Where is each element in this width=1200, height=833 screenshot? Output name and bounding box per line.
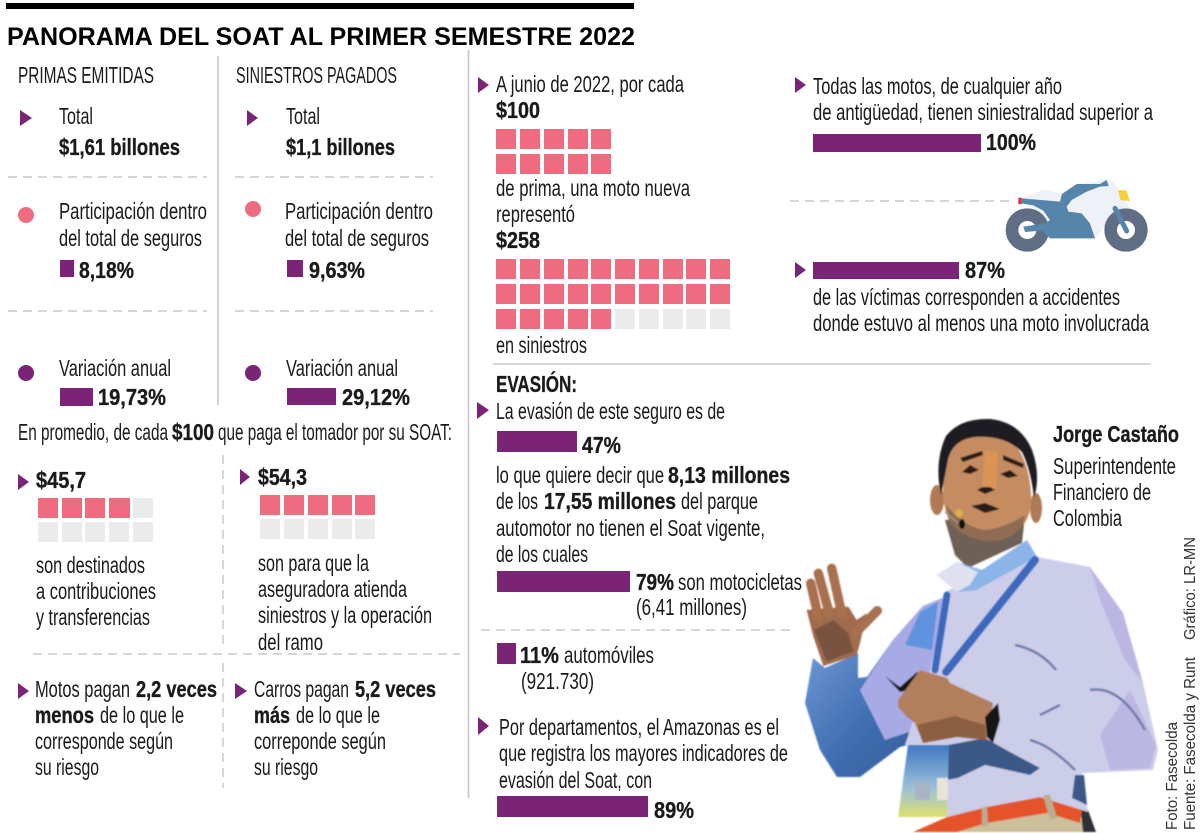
text millones: 17,55 millones — [544, 488, 676, 514]
trousers — [950, 810, 1086, 832]
text motos: de lo que le — [100, 702, 184, 728]
panel: $54,3 — [240, 464, 432, 655]
icon: triangle 87% — [795, 262, 806, 278]
torso — [905, 557, 1158, 817]
bar 19,73% — [60, 384, 166, 410]
total siniestros: $1,1 billones — [286, 134, 395, 160]
panel: a junio de 2022 — [478, 71, 730, 358]
total siniestros: Total — [286, 103, 320, 129]
text carros: correponde según — [254, 728, 386, 754]
collar — [937, 540, 1037, 592]
heading: primas emitidas: PRIMAS EMITIDAS — [18, 62, 154, 88]
bar 100% — [813, 129, 1036, 155]
text motos: 2,2 veces — [136, 676, 217, 702]
text en siniestros: en siniestros — [496, 332, 587, 358]
intro sentence: en promedio: que paga el tomador por su SOAT: — [218, 419, 452, 445]
participation text siniestros: del total de seguros — [285, 225, 429, 251]
shirt shadows — [947, 738, 1087, 805]
text motos — [35, 676, 217, 780]
text carros: su riesgo — [254, 754, 318, 780]
text carros: 5,2 veces — [355, 676, 436, 702]
waffle chart 54,3 — [260, 495, 375, 539]
text de prima: representó — [496, 201, 575, 227]
portrait illustration: Jorge Castaño — [805, 419, 1158, 832]
panel: evasión — [477, 370, 802, 823]
total primas: $1,61 billones — [59, 134, 180, 160]
participation text — [59, 198, 207, 251]
bar 47% — [497, 431, 621, 458]
vertical credits — [1164, 537, 1199, 830]
panel: 87% victimas — [795, 257, 1149, 336]
text motos: su riesgo — [35, 754, 99, 780]
text departamentos — [499, 714, 788, 793]
icon: purple circle — [18, 365, 34, 381]
variation text siniestros: Variación anual — [286, 355, 398, 381]
bar 87% — [813, 257, 1005, 283]
value $45,7: $45,7 — [36, 467, 86, 493]
bar 9,63%: 9,63% — [309, 257, 365, 283]
text carros: de lo que le — [296, 702, 380, 728]
text departamentos: Por departamentos, el Amazonas es el — [499, 714, 779, 740]
eyes, brows, nose and mouth — [960, 451, 1024, 513]
icon: triangle total — [20, 110, 32, 126]
intro sentence: en promedio: En promedio, de cada — [18, 419, 168, 445]
text carros — [254, 676, 436, 780]
text de prima: $258 — [496, 227, 540, 253]
participation text: del total de seguros — [59, 225, 202, 251]
text todas las motos — [813, 73, 1153, 125]
text motos: menos — [35, 702, 94, 728]
text a junio — [496, 71, 684, 123]
bar 79% motocicletas — [497, 569, 802, 620]
icon: pink circle — [18, 207, 34, 223]
vertical credits: Fuente: Fasecolda y Runt — [1182, 656, 1199, 830]
icon: triangle junio — [478, 77, 489, 93]
text departamentos: evasión del Soat, con — [499, 767, 652, 793]
description 45,7: a contribuciones — [36, 578, 156, 604]
text millones: de los cuales — [496, 541, 588, 567]
bar 29,12%: 29,12% — [342, 384, 410, 410]
description 54,3: del ramo — [258, 629, 323, 655]
panel: primas emitidas — [18, 62, 207, 410]
text a junio: A junio de 2022, por cada — [496, 71, 684, 97]
description 45,7 — [36, 552, 156, 630]
person name and role — [1053, 421, 1179, 531]
text a junio: $100 — [496, 97, 540, 123]
panel: todas las motos — [795, 73, 1153, 155]
panel: carros pagan — [235, 676, 436, 780]
total siniestros — [286, 103, 395, 160]
badge — [898, 745, 949, 817]
bar 79% motocicletas: (6,41 millones) — [636, 594, 747, 620]
text millones: del parque — [681, 488, 758, 514]
icon: triangle 54,3 — [240, 469, 250, 485]
bar 89% — [497, 796, 694, 823]
icon: triangle carros — [235, 683, 247, 699]
text millones: lo que quiere decir que — [496, 462, 664, 488]
description 45,7: son destinados — [36, 552, 145, 578]
text de prima — [496, 175, 690, 253]
bar 19,73%: 19,73% — [98, 384, 166, 410]
text carros: Carros pagan — [254, 676, 349, 702]
face — [943, 435, 1031, 541]
waffle chart 45,7 — [38, 498, 153, 542]
heading: siniestros pagados: SINIESTROS PAGADOS — [236, 62, 397, 88]
panel: siniestros pagados — [236, 62, 433, 410]
bar 8,18%: 8,18% — [79, 257, 134, 283]
panel: motos pagan — [18, 676, 217, 780]
icon: triangle todas las motos — [795, 77, 806, 93]
ears — [930, 485, 1042, 523]
heading: evasión: EVASIÓN: — [496, 370, 577, 397]
participation text siniestros: Participación dentro — [285, 198, 433, 224]
bar 9,63% — [287, 257, 365, 283]
text evasion: La evasión de este seguro es de — [496, 398, 725, 424]
neck — [945, 515, 1025, 568]
description 45,7: y transferencias — [36, 604, 150, 630]
bar 8,18% — [60, 257, 134, 283]
bar 79% motocicletas: 79% — [636, 569, 674, 595]
icon: triangle motos — [18, 683, 29, 699]
sleeve and upper left torso — [805, 597, 960, 777]
total primas: Total — [59, 103, 93, 129]
intro sentence: en promedio — [18, 419, 452, 445]
bar 11% automoviles: 11% — [520, 642, 559, 668]
raised hand — [807, 568, 877, 666]
icon: motorcycle — [1012, 179, 1141, 245]
icon: pink circle siniestros — [245, 201, 261, 217]
bar 87%: 87% — [965, 257, 1005, 283]
description 54,3: siniestros y la operación — [258, 602, 432, 628]
text carros: más — [254, 702, 290, 728]
person name and role: Colombia — [1053, 505, 1122, 531]
waffle chart $258 — [496, 259, 730, 329]
participation text siniestros — [285, 198, 433, 251]
vertical credits: Gráfico: LR-MN — [1182, 537, 1199, 640]
description 54,3: aseguradora atienda — [258, 576, 407, 602]
text millones: 8,13 millones — [668, 462, 790, 488]
bar 47%: 47% — [582, 432, 621, 458]
holding hand — [885, 670, 1000, 743]
bar 11% automoviles: (921.730) — [521, 668, 594, 694]
icon: triangle departamentos — [478, 717, 489, 735]
text de prima: de prima, una moto nueva — [496, 175, 690, 201]
person name and role: Financiero de — [1053, 479, 1151, 505]
bar 29,12% — [287, 384, 410, 410]
variation text: Variación anual — [59, 355, 171, 381]
title: PANORAMA DEL SOAT AL PRIMER SEMESTRE 2022 — [7, 23, 635, 51]
top rule — [6, 3, 634, 9]
intro sentence: en promedio: $100 — [172, 419, 214, 445]
icon: triangle 45,7 — [18, 474, 29, 490]
hair — [938, 419, 1037, 498]
text departamentos: que registra los mayores indicadores de — [499, 740, 788, 766]
lanyard — [935, 560, 1035, 672]
bar 89%: 89% — [654, 797, 694, 823]
total primas — [59, 103, 180, 160]
bar 79% motocicletas: son motocicletas — [678, 569, 802, 595]
waffle chart $100 — [496, 129, 611, 174]
belt — [913, 795, 1082, 832]
bar 11% automoviles: automóviles — [564, 642, 654, 668]
text millones: automotor no tienen el Soat vigente, — [496, 515, 765, 541]
text millones: de los — [496, 488, 538, 514]
text motos: corresponde según — [35, 728, 173, 754]
text todas las motos: Todas las motos, de cualquier año — [813, 73, 1062, 99]
microphone — [945, 509, 965, 529]
participation text: Participación dentro — [59, 198, 207, 224]
text motos: Motos pagan — [35, 676, 130, 702]
description 54,3: son para que la — [258, 550, 369, 576]
icon: triangle total siniestros — [247, 110, 258, 126]
text millones — [496, 462, 790, 567]
icon: triangle evasion — [477, 402, 489, 419]
description 54,3 — [258, 550, 432, 655]
bar 11% automoviles — [497, 642, 654, 694]
bar 100%: 100% — [986, 129, 1036, 155]
panel: $45,7 — [18, 467, 156, 630]
text victimas — [813, 284, 1149, 336]
icon: purple circle siniestros — [245, 365, 261, 381]
value $54,3: $54,3 — [258, 464, 307, 490]
vertical credits: Foto: Fasecolda — [1164, 722, 1181, 830]
